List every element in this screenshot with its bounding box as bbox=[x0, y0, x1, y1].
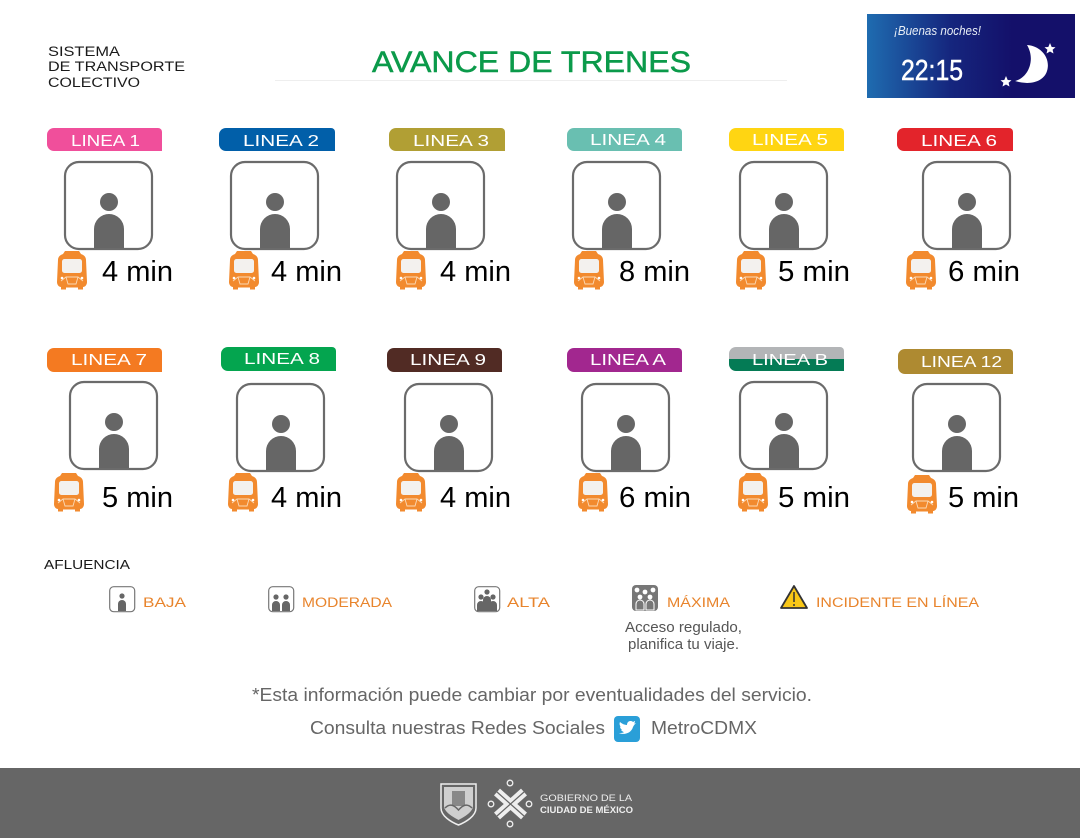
line 5 card: LINEA 5 bbox=[752, 132, 828, 149]
line 9 card: LINEA 9 bbox=[410, 352, 486, 369]
line 1 card bbox=[47, 128, 173, 290]
line 4 card: LINEA 4 bbox=[590, 132, 666, 149]
clock panel: 22:15 bbox=[901, 55, 963, 87]
line 12 card: 5 min bbox=[948, 482, 1019, 514]
government wordmark: GOBIERNO DE LA bbox=[540, 793, 632, 803]
legend: moderada: MODERADA bbox=[302, 595, 392, 610]
disclaimer: *Esta información puede cambiar por eventualidades del servicio. bbox=[252, 684, 812, 705]
legend: maxima note: planifica tu viaje. bbox=[628, 637, 739, 653]
line 5 card bbox=[729, 128, 850, 290]
line 7 card: 5 min bbox=[102, 482, 173, 514]
line 9 card bbox=[387, 348, 511, 514]
city logo bbox=[488, 780, 532, 827]
government wordmark bbox=[540, 793, 633, 815]
social line: Consulta nuestras Redes Sociales bbox=[310, 717, 605, 738]
line 3 card: LINEA 3 bbox=[413, 133, 489, 150]
clock panel: ¡Buenas noches! bbox=[894, 24, 981, 38]
line 12 card: LINEA 12 bbox=[921, 354, 1002, 371]
legend: moderada bbox=[269, 587, 392, 612]
coat of arms bbox=[441, 784, 476, 825]
line 8 card: 4 min bbox=[271, 482, 342, 514]
legend: incident warning bbox=[781, 586, 979, 610]
legend: alta: ALTA bbox=[507, 595, 550, 610]
legend: maxima note: Acceso regulado, bbox=[625, 620, 742, 636]
line B card bbox=[729, 347, 850, 514]
line 9 card: 4 min bbox=[440, 482, 511, 514]
line A card bbox=[567, 348, 691, 514]
line B card: 5 min bbox=[778, 482, 850, 514]
line 2 card bbox=[219, 128, 342, 290]
title: AVANCE DE TRENES bbox=[372, 46, 691, 79]
legend: baja: BAJA bbox=[143, 595, 186, 610]
header: organization name: SISTEMA bbox=[48, 44, 120, 59]
line B card: LINEA B bbox=[752, 352, 828, 369]
legend: incident warning: INCIDENTE EN LÍNEA bbox=[816, 595, 979, 610]
legend: maxima bbox=[632, 585, 730, 611]
line 3 card bbox=[389, 128, 511, 290]
header: organization name: DE TRANSPORTE bbox=[48, 59, 185, 74]
line 6 card bbox=[897, 128, 1020, 290]
legend: baja bbox=[110, 587, 186, 612]
social line bbox=[310, 716, 757, 742]
line A card: LINEA A bbox=[590, 352, 667, 369]
line A card: 6 min bbox=[619, 482, 691, 514]
line 1 card: 4 min bbox=[102, 256, 173, 288]
line 8 card: LINEA 8 bbox=[244, 351, 320, 368]
government wordmark: CIUDAD DE MÉXICO bbox=[540, 805, 633, 815]
clock panel bbox=[867, 14, 1075, 98]
legend: alta bbox=[475, 587, 550, 612]
legend heading: AFLUENCIA bbox=[44, 557, 130, 572]
line 4 card bbox=[567, 128, 690, 290]
header: organization name: COLECTIVO bbox=[48, 75, 140, 90]
legend: maxima: MÁXIMA bbox=[667, 595, 730, 610]
social line: MetroCDMX bbox=[651, 717, 757, 738]
line 8 card bbox=[221, 347, 342, 514]
footer bar bbox=[0, 768, 1080, 838]
line 5 card: 5 min bbox=[778, 256, 850, 288]
legend: maxima note bbox=[625, 620, 742, 653]
line 6 card: LINEA 6 bbox=[921, 133, 997, 150]
line 1 card: LINEA 1 bbox=[71, 133, 140, 150]
line 4 card: 8 min bbox=[619, 256, 690, 288]
line 2 card: 4 min bbox=[271, 256, 342, 288]
line 3 card: 4 min bbox=[440, 256, 511, 288]
line 7 card: LINEA 7 bbox=[71, 352, 147, 369]
header: organization name bbox=[48, 44, 185, 90]
line 2 card: LINEA 2 bbox=[243, 133, 319, 150]
line 6 card: 6 min bbox=[948, 256, 1020, 288]
line 12 card bbox=[898, 349, 1019, 514]
line 7 card bbox=[47, 348, 173, 514]
